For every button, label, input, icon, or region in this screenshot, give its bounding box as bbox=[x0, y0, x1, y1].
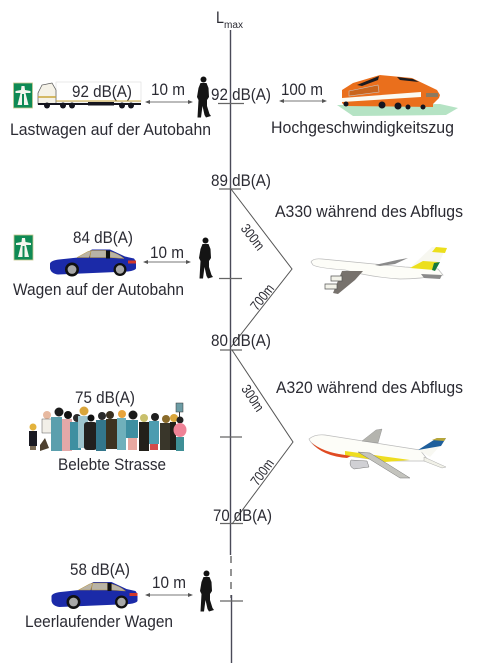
A330 heading: A330 während des Abflugs bbox=[275, 202, 463, 221]
300m label: 300m bbox=[238, 382, 268, 414]
icon: truck bbox=[38, 82, 141, 108]
car level: 84 dB(A) bbox=[73, 228, 133, 247]
700m label: 700m bbox=[247, 456, 277, 488]
icon: train bbox=[337, 75, 458, 116]
train label: Hochgeschwindigkeitszug bbox=[271, 118, 454, 137]
icon: A320 plane bbox=[309, 429, 446, 478]
panel: A330 takeoff bbox=[231, 189, 463, 347]
arrow bbox=[145, 100, 193, 104]
distance: 10 m bbox=[150, 243, 184, 262]
idling level: 58 dB(A) bbox=[70, 560, 130, 579]
level 80: 80 dB(A) bbox=[211, 331, 271, 350]
icon: car bbox=[50, 250, 136, 276]
icon: A330 plane bbox=[311, 247, 447, 294]
idling label: Leerlaufender Wagen bbox=[25, 612, 173, 631]
arrow bbox=[279, 99, 327, 103]
row: car on motorway bbox=[13, 228, 213, 299]
distance: 10 m bbox=[152, 573, 186, 592]
700m label: 700m bbox=[247, 281, 277, 313]
icon: crowd bbox=[29, 403, 186, 451]
truck label: Lastwagen auf der Autobahn bbox=[10, 120, 211, 139]
A320 heading: A320 während des Abflugs bbox=[276, 378, 463, 397]
icon: motorway sign bbox=[14, 235, 33, 260]
row: high speed train bbox=[271, 75, 458, 137]
icon: person bbox=[199, 238, 213, 278]
arrow bbox=[143, 260, 191, 264]
axis title: max bbox=[224, 20, 243, 31]
level 70: 70 dB(A) bbox=[213, 506, 272, 525]
300m label: 300m bbox=[238, 221, 268, 253]
panel: A320 takeoff bbox=[232, 350, 463, 524]
level 89: 89 dB(A) bbox=[211, 171, 271, 190]
truck level: 92 dB(A) bbox=[72, 82, 132, 101]
icon: person bbox=[200, 570, 214, 612]
row: busy street bbox=[29, 388, 186, 474]
icon: car bbox=[52, 582, 138, 609]
row: idling car bbox=[25, 560, 214, 631]
icon: motorway sign bbox=[14, 83, 32, 108]
flight path triangle bbox=[231, 189, 292, 347]
level 92: 92 dB(A) bbox=[211, 85, 271, 104]
distance: 100 m bbox=[281, 80, 323, 99]
row: truck on motorway bbox=[10, 76, 211, 139]
axis title: L bbox=[216, 8, 224, 27]
distance: 10 m bbox=[151, 80, 185, 99]
street label: Belebte Strasse bbox=[58, 455, 166, 474]
street level: 75 dB(A) bbox=[75, 388, 135, 407]
icon: person bbox=[197, 76, 211, 118]
axis title bbox=[216, 8, 243, 31]
arrow bbox=[145, 593, 193, 597]
car label: Wagen auf der Autobahn bbox=[13, 280, 184, 299]
flight path triangle bbox=[232, 350, 293, 524]
vertical Lmax axis bbox=[218, 30, 244, 663]
